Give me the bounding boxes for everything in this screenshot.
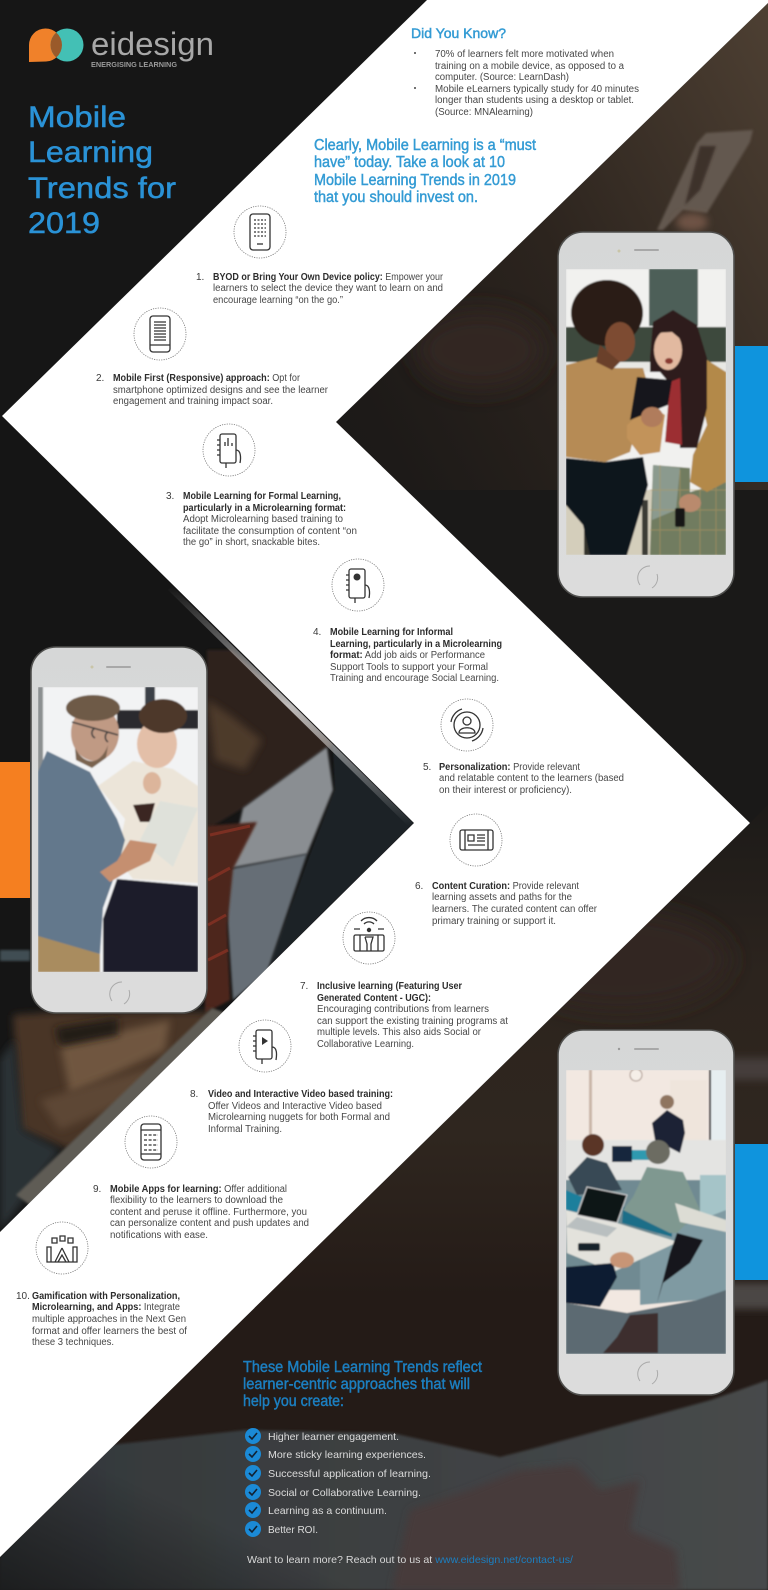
hand <box>100 840 157 882</box>
trend 3 text: the go” in short, snackable bites. <box>183 537 320 548</box>
trend 7 text: Collaborative Learning. <box>317 1039 414 1050</box>
trend 7 text: 7. <box>300 981 308 992</box>
trend 8 text: Video and Interactive Video based training: <box>208 1089 393 1100</box>
trend 2 text: engagement and training impact soar. <box>113 396 273 407</box>
benefit: higher engagement <box>245 1428 399 1444</box>
suit <box>270 745 414 965</box>
trend 4 text: format: Add job aids or Performance <box>330 650 485 661</box>
intro statement: have” today. Take a look at 10 <box>314 154 505 171</box>
hand <box>13 1012 215 1150</box>
icon: phone with app grid <box>125 1116 177 1168</box>
trend 8 text: Microlearning nuggets for both Formal and <box>208 1112 390 1123</box>
man's head <box>70 715 120 762</box>
icon: hand holding phone with chart <box>203 424 255 476</box>
trend 5 text: Personalization: Provide relevant <box>439 762 580 773</box>
trend 3 text: 3. <box>166 491 174 502</box>
logo mark <box>29 28 84 62</box>
title: Learning <box>28 136 153 169</box>
trend 1 text <box>196 272 444 306</box>
collar <box>230 747 333 868</box>
photo: classroom <box>566 1069 726 1354</box>
icon: responsive phone <box>134 308 186 360</box>
logo tagline: ENERGISING LEARNING <box>91 62 178 69</box>
did you know facts: training on a mobile device, as opposed to a <box>435 61 624 72</box>
benefit: higher engagement: Higher learner engagement. <box>268 1431 399 1443</box>
right student <box>623 1167 700 1233</box>
trend 4 text: Mobile Learning for Informal <box>330 627 453 638</box>
blouse <box>98 761 198 883</box>
trend 9 text: content and peruse it offline. Furthermore, you <box>110 1207 307 1218</box>
trend 5 text: 5. <box>423 762 431 773</box>
trend 8 text: Offer Videos and Interactive Video based <box>208 1101 382 1112</box>
trend 2 text: Mobile First (Responsive) approach: Opt for <box>113 373 301 384</box>
icon: smartphone keypad <box>234 206 286 258</box>
trend 6 text: 6. <box>415 881 423 892</box>
title <box>28 101 176 240</box>
intro statement: that you should invest on. <box>314 189 478 206</box>
bag <box>603 1313 658 1353</box>
trend 10 <box>16 1222 187 1348</box>
closing heading: learner-centric approaches that will <box>243 1376 470 1393</box>
trend 3 text: Adopt Microlearning based training to <box>183 514 343 525</box>
did you know panel <box>411 25 639 118</box>
phone 1 <box>558 232 734 597</box>
trend 4 text: Training and encourage Social Learning. <box>330 673 499 684</box>
trend 9 text: 9. <box>93 1184 101 1195</box>
did you know facts: Mobile eLearners typically study for 40 minutes <box>435 84 639 95</box>
plaid trousers <box>650 465 726 555</box>
trend 6 text: learning assets and paths for the <box>432 892 572 903</box>
laptop back <box>612 1146 632 1162</box>
trend 7 text: Generated Content - UGC): <box>317 993 431 1004</box>
hand with phone <box>679 494 701 512</box>
teal chairs <box>566 1190 582 1212</box>
benefit: continuum <box>245 1502 387 1518</box>
trend 8 text: Informal Training. <box>208 1124 282 1135</box>
logo wordmark: eidesign <box>91 26 214 62</box>
trend 9 text: flexibility to the learners to download the <box>110 1195 283 1206</box>
trend 4 text: Support Tools to support your Formal <box>330 662 488 673</box>
face <box>605 322 635 362</box>
closing heading: These Mobile Learning Trends reflect <box>243 1359 483 1376</box>
photo: two women with tablet <box>566 269 726 555</box>
trend 7 text: Inclusive learning (Featuring User <box>317 981 462 992</box>
trend 10 text: these 3 techniques. <box>32 1337 114 1348</box>
title: Mobile <box>28 101 126 134</box>
laptop <box>577 1187 627 1223</box>
trend 2 text: smartphone optimized designs and see the learner <box>113 385 329 396</box>
trend 6 text: learners. The curated content can offer <box>432 904 598 915</box>
trend 2 text <box>96 373 329 407</box>
trend 10 text: Microlearning, and Apps: Integrate <box>32 1302 180 1313</box>
did you know facts: computer. (Source: LearnDash) <box>435 72 569 83</box>
blue shirt <box>38 751 125 954</box>
shirt <box>227 854 307 1000</box>
blue accent bar bottom right <box>735 1144 768 1280</box>
contact line: Want to learn more? Reach out to us at www.eidesign.net/contact-us/ <box>247 1554 573 1566</box>
trend 9 text: Mobile Apps for learning: Offer additional <box>110 1184 287 1195</box>
cardigan <box>690 360 726 492</box>
khaki trousers <box>38 933 100 972</box>
intro statement <box>314 137 537 206</box>
tie <box>205 822 257 1013</box>
icon: landscape tablet with article <box>450 814 502 866</box>
title: 2019 <box>28 207 100 240</box>
trend 4 text: Learning, particularly in a Microlearning <box>330 639 502 650</box>
trend 5 <box>423 699 624 796</box>
trend 4 text: 4. <box>313 627 321 638</box>
trend 2 <box>96 308 329 407</box>
trend 10 text: format and offer learners the best of <box>32 1326 187 1337</box>
face and chin behind phone <box>207 650 333 826</box>
woman's head <box>137 720 177 768</box>
benefit: application <box>245 1465 431 1481</box>
benefit: continuum: Learning as a continuum. <box>268 1505 387 1517</box>
benefit: ROI <box>245 1521 318 1537</box>
icon: person sharing from tablet <box>343 912 395 964</box>
closing heading <box>243 1359 483 1410</box>
trend 8 <box>190 1020 393 1135</box>
trend 5 text: and relatable content to the learners (based <box>439 773 624 784</box>
benefits checklist <box>245 1428 431 1537</box>
jeans <box>566 457 648 555</box>
dark trousers <box>657 1233 703 1303</box>
trend 4 text <box>313 627 502 684</box>
trend 5 text <box>423 762 624 796</box>
trend 5 text: on their interest or proficiency). <box>439 785 572 796</box>
trend 9 text <box>93 1184 309 1241</box>
icon: hand holding phone with video <box>239 1020 291 1072</box>
trend 3 text: particularly in a Microlearning format: <box>183 503 346 514</box>
benefit: social <box>245 1484 421 1500</box>
trend 1 text: 1. <box>196 272 204 283</box>
paper beneath hand <box>0 1380 768 1590</box>
chin hand <box>143 772 161 794</box>
trend 7 text: can support the existing training programs at <box>317 1016 508 1027</box>
back row of desks <box>566 1140 726 1180</box>
did you know facts: 70% of learners felt more motivated when <box>435 49 614 60</box>
trend 6 <box>415 814 598 927</box>
trend 10 text <box>16 1291 187 1348</box>
blue accent bar top right <box>735 346 768 482</box>
trend 1 text: encourage learning “on the go.” <box>213 295 343 306</box>
trend 3 text: Mobile Learning for Formal Learning, <box>183 491 341 502</box>
trend 1 text: learners to select the device they want to learn on and <box>213 283 443 294</box>
orange accent bar <box>0 762 30 898</box>
did you know heading: Did You Know? <box>411 25 506 41</box>
trend 9 text: notifications with ease. <box>110 1230 208 1241</box>
trend 3 text <box>166 491 357 548</box>
benefit: sticky experiences <box>245 1446 426 1462</box>
trend 4 <box>313 559 502 684</box>
trend 9 text: can personalize content and push updates and <box>110 1218 309 1229</box>
benefit: social: Social or Collaborative Learning. <box>268 1487 421 1499</box>
icon: hand holding phone with check <box>332 559 384 611</box>
right desk <box>675 1203 726 1232</box>
icon: gamified tablet <box>36 1222 88 1274</box>
desk front <box>566 1210 678 1272</box>
necklace <box>133 803 155 822</box>
radiator <box>566 490 656 555</box>
trend 2 text: 2. <box>96 373 104 384</box>
trend 6 text: primary training or support it. <box>432 916 556 927</box>
trend 10 text: Gamification with Personalization, <box>32 1291 180 1302</box>
background: lower right photo panel <box>0 800 768 1590</box>
trend 9 <box>93 1116 309 1241</box>
trend 7 <box>300 912 508 1050</box>
icon: person in cycle <box>441 699 493 751</box>
did you know facts <box>414 49 639 118</box>
did you know facts: longer than students using a desktop or tablet. <box>435 95 634 106</box>
phone 3 <box>558 1030 734 1395</box>
decorative highlight streaks <box>168 108 412 826</box>
benefit: application: Successful application of learning. <box>268 1468 431 1480</box>
trend 6 text: Content Curation: Provide relevant <box>432 881 579 892</box>
benefit: sticky experiences: More sticky learning experiences. <box>268 1449 426 1461</box>
title: Trends for <box>28 172 176 205</box>
logo: eidesign <box>29 26 214 69</box>
closing heading: help you create: <box>243 1393 344 1410</box>
background: upper right photo panel <box>378 3 768 490</box>
vignette <box>0 1498 266 1590</box>
left student <box>568 1157 622 1195</box>
photo: man and woman with tablet <box>38 687 198 972</box>
sleeve <box>566 1263 617 1307</box>
trend 7 text: multiple levels. This also aids Social or <box>317 1027 482 1038</box>
trend 10 text: multiple approaches in the Next Gen <box>32 1314 186 1325</box>
trend 1 text: BYOD or Bring Your Own Device policy: Empower your <box>213 272 444 283</box>
trend 8 text: 8. <box>190 1089 198 1100</box>
intro statement: Clearly, Mobile Learning is a “must <box>314 137 537 154</box>
trend 7 text: Encouraging contributions from learners <box>317 1004 489 1015</box>
navy trousers <box>103 879 198 972</box>
sleeve and hand <box>628 412 666 456</box>
fingers <box>392 1465 680 1590</box>
intro statement: Mobile Learning Trends in 2019 <box>314 172 516 189</box>
trend 10 text: 10. <box>16 1291 30 1302</box>
benefit: ROI: Better ROI. <box>268 1524 318 1536</box>
trend 3 text: facilitate the consumption of content “on <box>183 526 357 537</box>
trend 8 text <box>190 1089 393 1135</box>
mustard shirt <box>566 357 647 462</box>
afro hair <box>571 280 643 346</box>
presenter <box>652 1110 685 1153</box>
long hair <box>650 310 707 448</box>
did you know facts: (Source: MNAlearning) <box>435 107 533 118</box>
floor <box>566 1280 726 1354</box>
trend 7 text <box>300 981 508 1050</box>
background: left middle photo panel <box>0 650 414 1228</box>
trend 1 <box>196 206 444 306</box>
trend 6 text <box>415 881 598 927</box>
trend 3 <box>166 424 357 548</box>
phone 2 <box>31 647 207 1013</box>
tablet <box>140 801 198 867</box>
tablet <box>630 377 672 420</box>
red top <box>665 378 682 445</box>
